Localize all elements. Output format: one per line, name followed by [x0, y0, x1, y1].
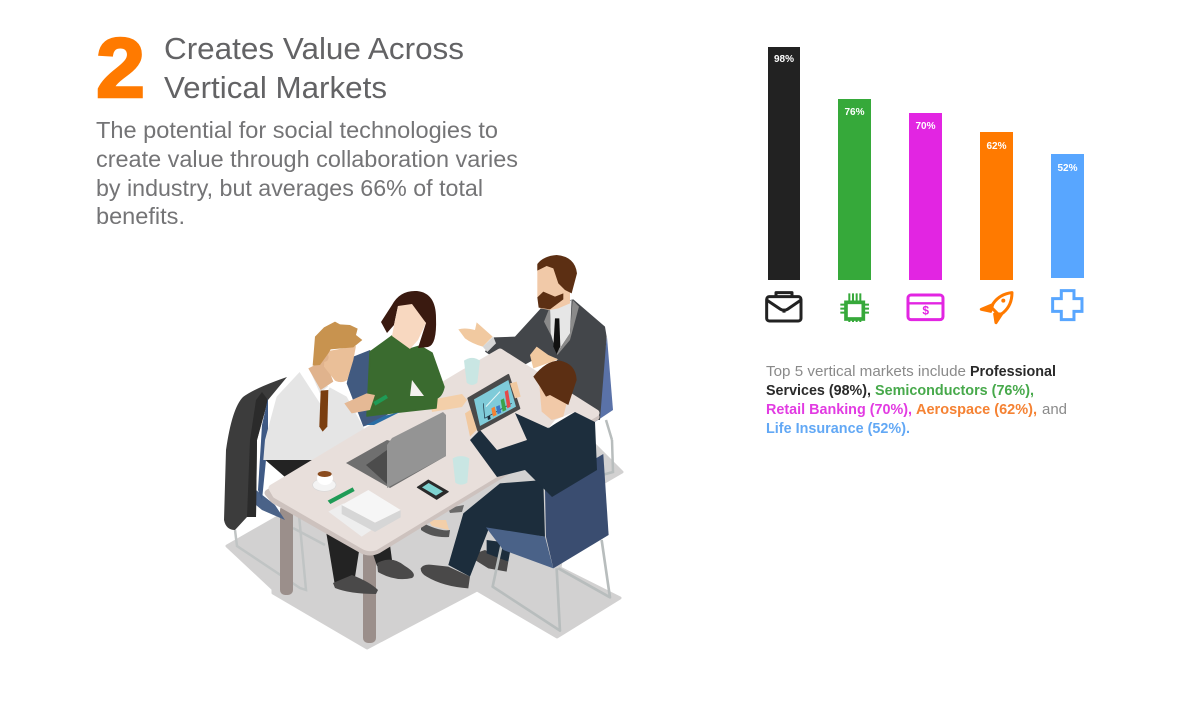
chair: bearded man [595, 337, 613, 475]
bar: professional services 98%: 98% [774, 54, 794, 65]
section number: 2 [96, 21, 145, 115]
hand holding tablet [465, 408, 478, 437]
woman [366, 291, 467, 425]
table top [268, 352, 596, 552]
left man [263, 322, 364, 460]
laptop [346, 412, 446, 488]
tablet and back man's head [465, 361, 577, 437]
caption text block: Life Insurance (52%). [766, 421, 910, 437]
woman's shoes [421, 505, 464, 537]
icon: medical cross [1053, 291, 1082, 320]
sweater [367, 336, 444, 416]
neck and collar [299, 367, 333, 403]
caption text block: Retail Banking (70%), [766, 402, 912, 418]
caption text block: Aerospace (62%), [916, 402, 1037, 418]
icon: bank card [908, 295, 943, 320]
bar: professional services 98% [768, 47, 800, 280]
neck and face [537, 263, 570, 310]
hair [313, 322, 362, 366]
bar: semiconductors 76% [838, 99, 871, 280]
intro text block: benefits. [96, 203, 185, 229]
hair [537, 255, 577, 293]
bar: retail banking 70%: 70% [915, 121, 936, 132]
left man's hand and pen [344, 393, 388, 413]
blue seat strip [366, 412, 400, 425]
left man's trousers and shoes [263, 450, 414, 594]
bar: aerospace 62% [980, 132, 1013, 280]
heading: Creates Value Across [164, 31, 464, 66]
phone [417, 480, 448, 499]
back man's chair [486, 454, 610, 631]
coffee cup [313, 471, 336, 491]
intro text block: create value through collaboration varies [96, 146, 518, 172]
bar: aerospace 62%: 62% [986, 141, 1007, 152]
hand [430, 394, 467, 412]
back man's collar [548, 412, 575, 428]
woman's chair [347, 350, 407, 427]
caption text block: Professional [970, 364, 1056, 380]
back man's torso [470, 412, 597, 497]
chair: left man's legs [235, 515, 325, 590]
intro text block: by industry, but averages 66% of total [96, 175, 483, 201]
hair [533, 361, 577, 405]
illustration: team meeting around a table [224, 255, 622, 648]
second hand [530, 347, 558, 368]
face [392, 304, 426, 349]
shirt [550, 300, 572, 353]
bar: semiconductors 76%: 76% [844, 107, 865, 118]
beard [537, 292, 563, 309]
face side [539, 385, 567, 420]
water glass: far side [464, 358, 480, 385]
shirt [263, 368, 364, 460]
intro text block: The potential for social technologies to [96, 117, 498, 143]
face [324, 346, 356, 382]
table objects [313, 456, 469, 537]
tie [553, 318, 560, 354]
caption text block [766, 364, 1067, 437]
caption text block: Top 5 vertical markets include [766, 364, 966, 380]
icon: briefcase [767, 293, 801, 321]
left man's jacket on chair [224, 377, 287, 530]
icon: rocket [981, 293, 1012, 323]
icon: microchip [840, 293, 869, 322]
icon: bank card: $ [922, 304, 929, 318]
caption text block: Services (98%), [766, 383, 871, 399]
closed box [342, 490, 401, 532]
bearded man [458, 255, 607, 420]
tie [319, 390, 328, 432]
bar: life insurance 52% [1051, 154, 1084, 278]
bar: retail banking 70% [909, 113, 942, 280]
pen [328, 487, 355, 504]
bar: life insurance 52%: 52% [1057, 163, 1078, 174]
lapels [544, 300, 579, 355]
jacket [485, 299, 607, 420]
right hand on tablet [510, 382, 521, 398]
back man's trousers and shoes [421, 480, 545, 588]
tablet [468, 375, 519, 431]
caption text block: Semiconductors (76%), [875, 383, 1034, 399]
water glass [453, 456, 469, 485]
caption text block: and [1042, 402, 1067, 418]
gap between arm and body [410, 380, 424, 396]
hair [381, 291, 436, 348]
table legs [280, 505, 376, 643]
heading [164, 31, 464, 105]
intro text block [96, 117, 518, 229]
cuff and hand [483, 337, 496, 352]
paper sheet [328, 503, 377, 537]
heading: Vertical Markets [164, 70, 387, 105]
floor shadow [227, 440, 622, 648]
bar chart [768, 47, 1084, 280]
